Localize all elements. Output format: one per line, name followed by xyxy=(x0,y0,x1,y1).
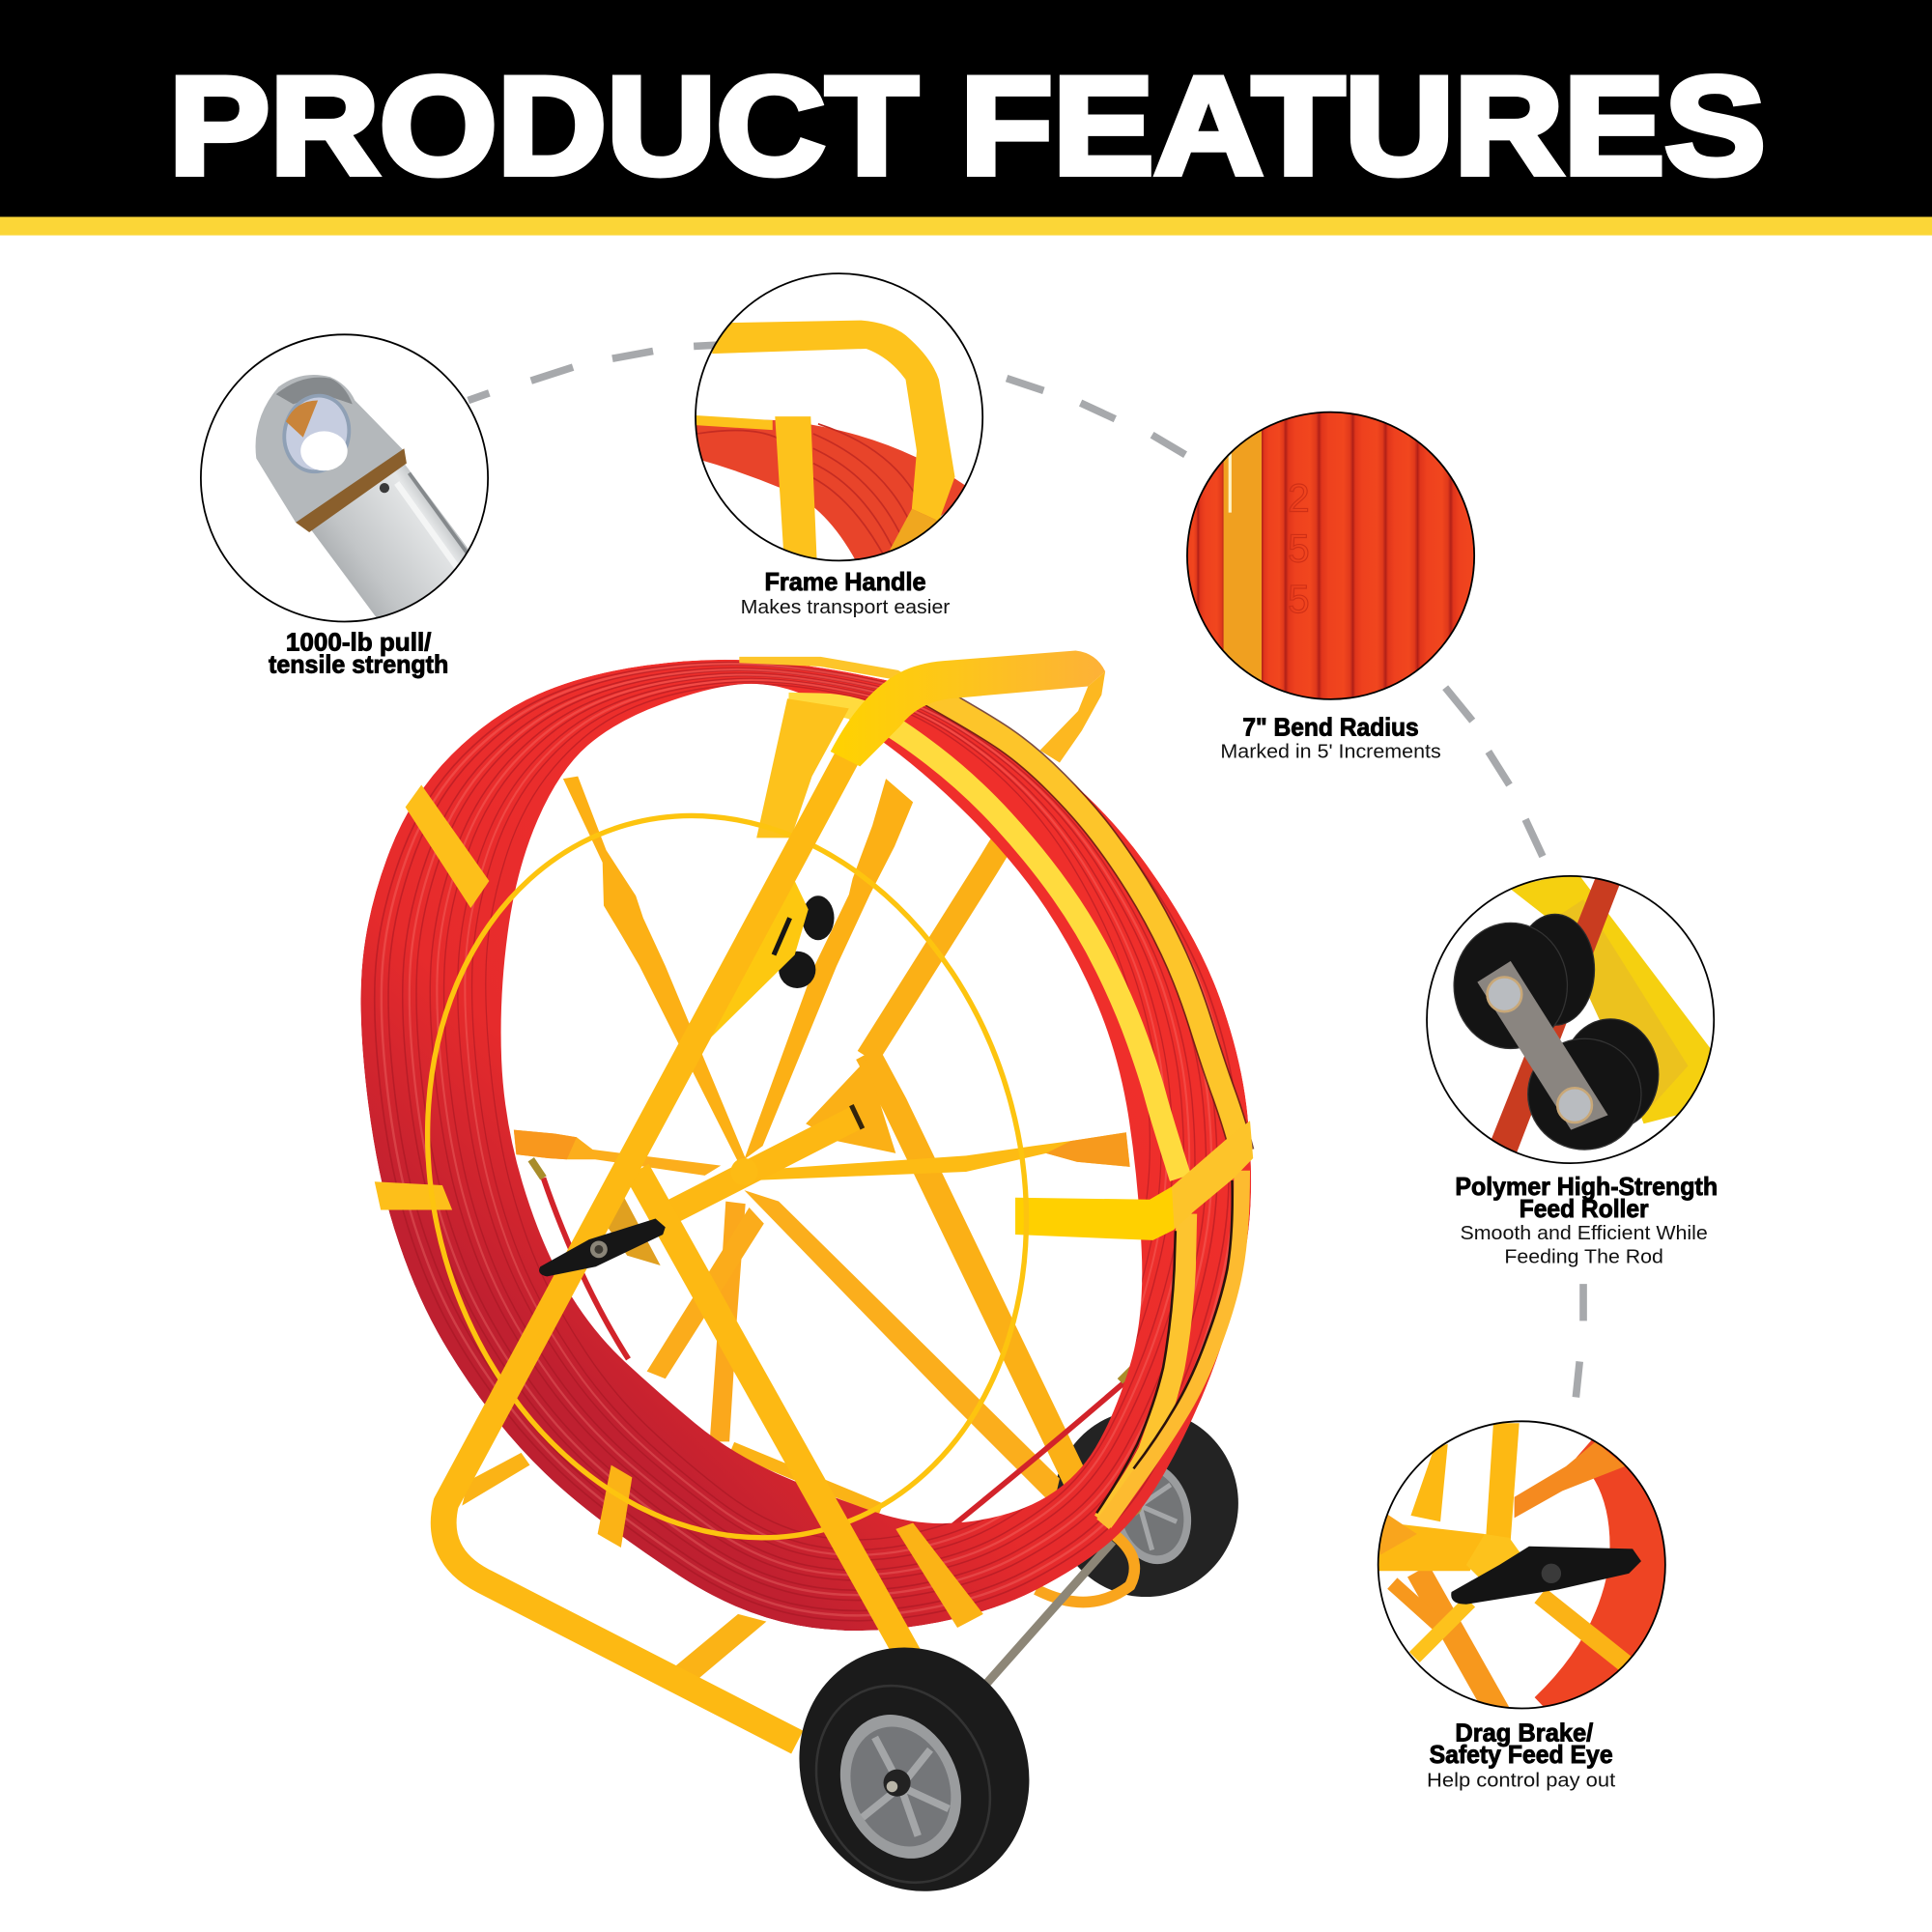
callout: bend radius rod: 5 xyxy=(1288,577,1310,621)
label: Feed Roller xyxy=(1520,1196,1649,1223)
label: Marked in 5' Increments xyxy=(1220,741,1441,762)
label: Makes transport easier xyxy=(741,597,951,618)
dashed connector: roller to drag brake xyxy=(1576,1284,1583,1397)
rear frame and spokes xyxy=(462,671,1130,1681)
label: Frame Handle xyxy=(764,569,926,596)
label: 7" Bend Radius xyxy=(1242,714,1419,741)
thin yellow guide ring xyxy=(344,744,1110,1609)
label: Smooth and Efficient While xyxy=(1460,1223,1708,1244)
label xyxy=(269,629,448,678)
black drag brake handle xyxy=(539,1218,666,1276)
thin red feed rod xyxy=(531,1159,1135,1562)
header banner xyxy=(0,0,1932,236)
label xyxy=(1220,714,1441,762)
drag brake mounting plate xyxy=(603,1191,661,1265)
front frame and handle xyxy=(443,650,1105,1743)
label xyxy=(1427,1719,1616,1791)
label: tensile strength xyxy=(269,651,448,678)
yellow strapping bands on coil xyxy=(375,657,1253,1628)
label: 1000-lb pull/ xyxy=(286,629,431,656)
callout: bend radius rod: 5 xyxy=(1288,526,1310,571)
callout: bend radius rod xyxy=(1177,407,1485,762)
dashed connector: eye to handle xyxy=(469,345,717,401)
red coil xyxy=(360,660,1251,1631)
label xyxy=(741,569,951,618)
roller knob and bracket behind frame xyxy=(707,881,835,1041)
label: Feeding The Rod xyxy=(1504,1246,1663,1267)
callout: drag brake xyxy=(1378,1421,1665,1791)
brake bracket and rod xyxy=(977,1529,1134,1694)
dashed connector: handle to bend radius xyxy=(1007,379,1185,455)
label: Polymer High-Strength xyxy=(1455,1174,1718,1201)
product: fiberglass duct rodder reel xyxy=(344,650,1253,1932)
title: PRODUCT FEATURES xyxy=(169,48,1766,204)
label: Safety Feed Eye xyxy=(1430,1742,1613,1769)
rear wheel xyxy=(1054,1409,1238,1597)
front wheel xyxy=(756,1606,1071,1932)
label xyxy=(1455,1174,1718,1267)
callout: pulling eye xyxy=(201,334,488,678)
label: Drag Brake/ xyxy=(1455,1719,1593,1747)
callout: feed roller xyxy=(1427,872,1719,1267)
callout: frame handle xyxy=(694,273,982,618)
dashed connector: bend radius to roller xyxy=(1445,688,1543,856)
label: Help control pay out xyxy=(1427,1770,1616,1791)
callout: bend radius rod: 2 xyxy=(1288,475,1310,520)
